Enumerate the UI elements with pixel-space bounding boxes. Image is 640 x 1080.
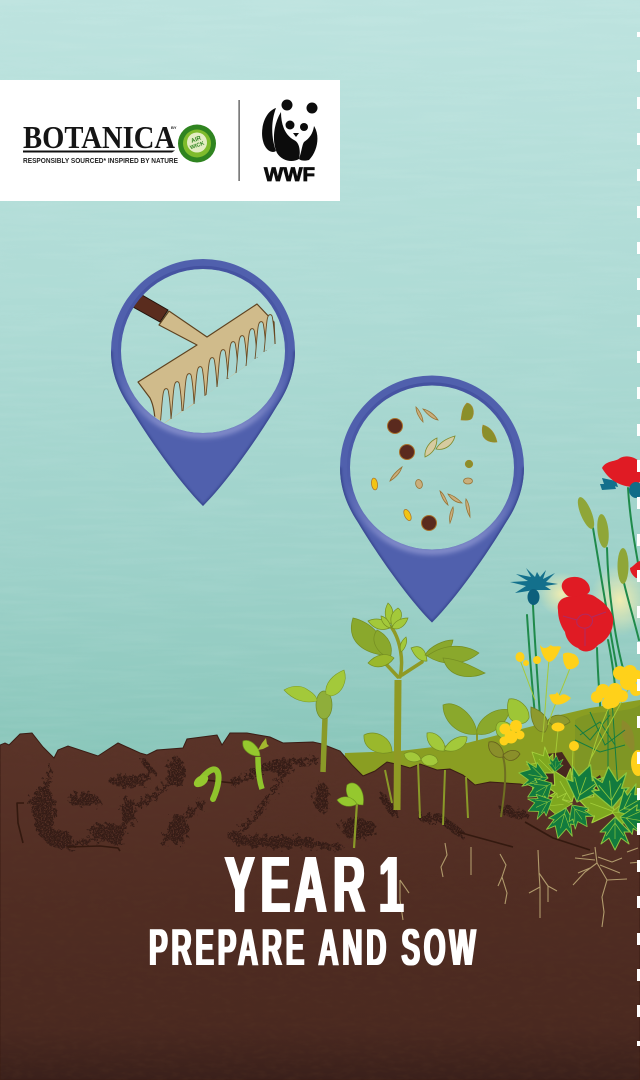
rake pin — [111, 259, 295, 506]
title: year 1: YEAR 1 — [225, 840, 403, 929]
sprout: tall seedling with bulb — [284, 670, 345, 772]
subtitle: prepare and sow: PREPARE AND SOW — [149, 918, 479, 976]
background foliage — [531, 700, 640, 790]
leafy rosette — [516, 742, 640, 850]
seeds pin — [340, 376, 524, 622]
logo panel — [0, 80, 340, 201]
air wick badge — [178, 124, 216, 162]
soil — [0, 733, 640, 1080]
cattail seed heads — [575, 495, 628, 584]
large red poppy — [558, 577, 613, 651]
wwf lettering: WWF — [264, 165, 315, 186]
wordmark underline — [23, 150, 175, 152]
tagline: RESPONSIBLY SOURCED* INSPIRED BY NATURE — [23, 158, 178, 165]
brown seedling — [489, 742, 520, 817]
glow behind poppy — [538, 564, 640, 636]
sprout: young shoot — [243, 738, 269, 789]
thin crack lines — [17, 780, 590, 851]
sprout: small seedling in soil — [337, 783, 364, 848]
botanica wordmark: BOTANICA — [23, 119, 175, 155]
cornflower — [510, 568, 558, 605]
by mark: BY — [171, 125, 177, 130]
air wick badge: AIR — [190, 135, 203, 145]
olive ground behind soil — [340, 700, 640, 830]
divider — [238, 100, 240, 181]
lower seedlings — [364, 699, 529, 825]
air wick badge: WICK — [189, 141, 205, 151]
top right poppy — [600, 456, 640, 498]
white dashed right edge — [637, 32, 640, 1046]
small poppy at right edge — [630, 561, 640, 578]
soil texture — [0, 730, 640, 1080]
roots — [400, 843, 640, 927]
wwf panda — [262, 100, 318, 161]
buttercups — [500, 645, 640, 780]
sprout: bent seedling — [192, 769, 219, 799]
soil pockets — [545, 752, 610, 806]
cracks in soil — [30, 757, 523, 848]
wildflower stems — [527, 488, 639, 752]
big plant — [351, 603, 485, 810]
